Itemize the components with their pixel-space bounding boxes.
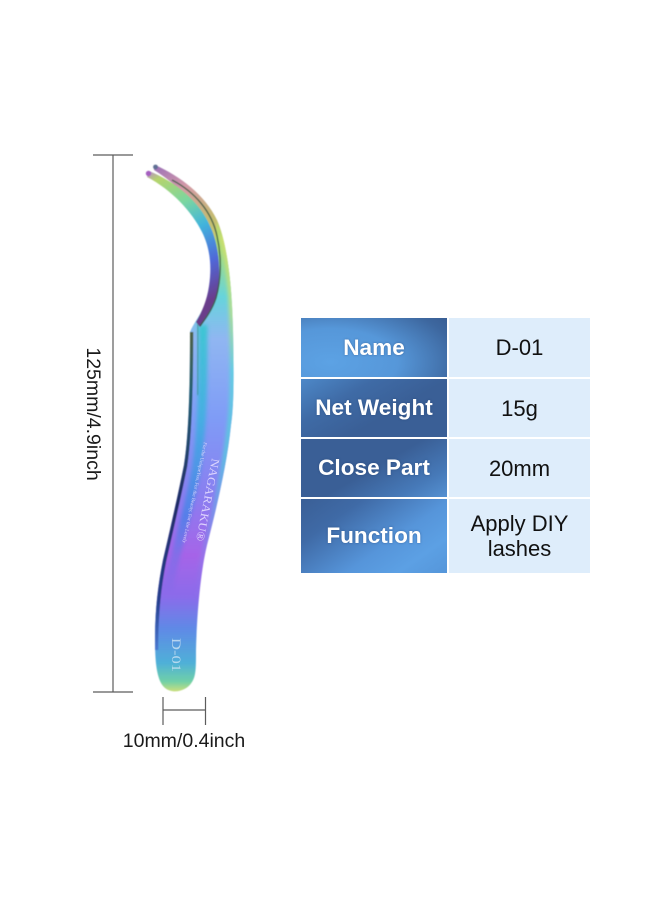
- left colour band: [168, 325, 203, 590]
- row 4 value: [449, 499, 590, 573]
- row 4 value: Apply DIY: [471, 511, 568, 536]
- row 2 value: 15g: [501, 396, 538, 420]
- tip: [153, 165, 158, 169]
- row 4 value: lashes: [488, 536, 551, 561]
- engraved model: D-01: [169, 638, 184, 672]
- tweezers illustration: [146, 165, 234, 691]
- row 1 label: [301, 318, 447, 377]
- row 2 label: Net Weight: [315, 395, 433, 420]
- handle sheen: [156, 235, 232, 650]
- green strip beside edge: [196, 322, 199, 395]
- row 4 label: Function: [326, 523, 422, 548]
- dark left edge: [156, 332, 191, 650]
- row 2 value: [449, 379, 590, 437]
- row 2 label: [301, 379, 447, 437]
- dimension: height label: 125mm/4.9inch: [82, 347, 104, 481]
- row 3 value: [449, 439, 590, 497]
- dimension: width bracket: [163, 697, 206, 725]
- right edge colour band: [198, 235, 232, 600]
- back arm: [154, 165, 232, 320]
- handle body: [155, 222, 234, 691]
- engraved slogan: For the UniqueYou, For the Beauty, For the Lovely: [181, 442, 207, 544]
- row 1 value: [449, 318, 590, 377]
- row 1 label: Name: [343, 334, 405, 360]
- row 1 value: D-01: [496, 335, 543, 360]
- row 3 value: 20mm: [489, 456, 550, 480]
- tweezers diagram with dimension lines: [87, 154, 244, 747]
- front arm: [147, 171, 219, 327]
- front arm shadow line: [172, 180, 220, 326]
- row 4 label: [301, 499, 447, 573]
- tip: [146, 171, 151, 176]
- engraved brand: NAGARAKU®: [193, 457, 221, 542]
- dimension: width label: 10mm/0.4inch: [123, 730, 245, 752]
- dimension: height bracket: [93, 155, 133, 692]
- row 3 label: [301, 439, 447, 497]
- row 3 label: Close Part: [318, 455, 430, 480]
